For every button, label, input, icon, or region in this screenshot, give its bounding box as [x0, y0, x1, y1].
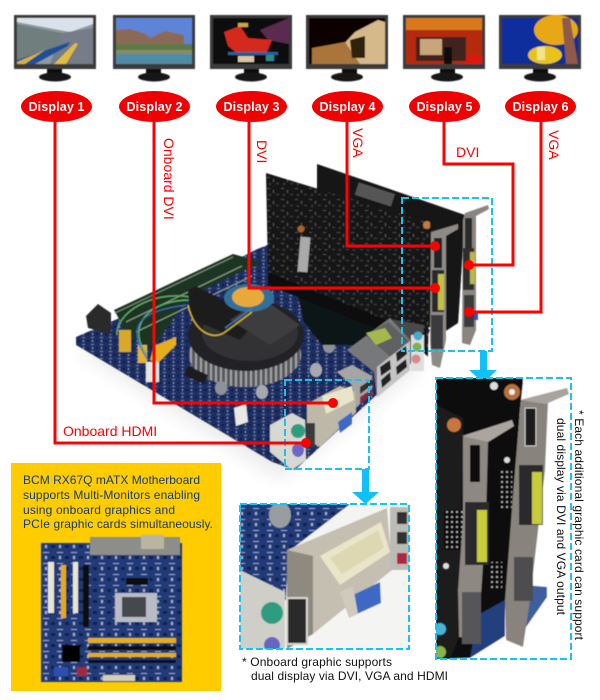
badge: display 3: Display 3 [224, 100, 280, 114]
label: VGA display 6: VGA [546, 130, 562, 160]
label: DVI vertical: DVI [254, 140, 270, 163]
monitor: display 2 [113, 15, 195, 82]
rear card chip detail [355, 182, 395, 207]
summary text: BCM RX67Q mATX Motherboard [23, 473, 200, 487]
badge: display 6 [505, 91, 576, 122]
arrow: card zoom [469, 351, 497, 383]
panel: product summary [11, 463, 221, 691]
onboard DVI and VGA connectors [307, 386, 356, 447]
panel: graphic card connector close-up [434, 378, 571, 659]
summary text [23, 473, 213, 531]
label: DVI horizontal: DVI [456, 144, 479, 160]
note: additional graphic card [554, 410, 586, 641]
label: Onboard HDMI: Onboard HDMI [63, 423, 157, 439]
badge: display 5: Display 5 [416, 100, 473, 114]
rear card bracket [462, 205, 489, 345]
line: display 2 to onboard DVI [154, 120, 333, 403]
connection labels [63, 128, 562, 439]
monitor: display 4 [306, 15, 388, 82]
badge: display 6: Display 6 [512, 100, 569, 114]
CPU cooler [188, 284, 304, 387]
motherboard photo with graphic cards [76, 164, 489, 480]
soft floor shadow [76, 300, 425, 480]
rear IO audio jacks [388, 319, 424, 371]
label: Onboard DVI: Onboard DVI [161, 138, 177, 220]
red connection lines [55, 120, 541, 443]
line: display 1 to HDMI [55, 120, 306, 443]
connection dots [301, 241, 474, 448]
rear graphic card [317, 164, 465, 330]
memory modules [114, 254, 262, 363]
line: display 5 to DVI [444, 120, 513, 265]
monitor: display 3 [210, 15, 292, 82]
motherboard top view [41, 535, 182, 682]
label: VGA display 4: VGA [350, 128, 366, 158]
display badges [21, 91, 576, 122]
front graphic card [266, 173, 430, 357]
note: onboard graphic: * Onboard graphic supports [242, 655, 392, 669]
motherboard [76, 232, 430, 470]
summary text: supports Multi-Monitors enabling [23, 488, 200, 502]
monitor: display 6 [499, 15, 581, 82]
summary text: using onboard graphics and [23, 503, 175, 517]
line: display 3 to DVI [249, 120, 435, 288]
summary text: PCIe graphic cards simultaneously. [23, 517, 213, 531]
line: display 4 to VGA [347, 120, 435, 246]
note: additional graphic card: * Each additional graphic card can support [572, 410, 586, 641]
arrow: onboard zoom [352, 469, 379, 504]
badge: display 3 [216, 91, 287, 122]
card slots [268, 272, 393, 330]
badge: display 5 [409, 91, 480, 122]
PS/2 block and HDMI port [270, 413, 315, 470]
badge: display 1 [21, 91, 92, 122]
front card label and screw hole [297, 221, 431, 272]
note: onboard graphic: dual display via DVI, VGA and HDMI [251, 669, 448, 683]
front card bracket [430, 224, 458, 368]
badge: display 1: Display 1 [28, 100, 85, 114]
rear card right side [430, 215, 465, 340]
badge: display 4: Display 4 [320, 100, 376, 114]
monitor: display 1 [14, 15, 96, 82]
rear IO USB and LAN stacks [337, 318, 410, 408]
monitors row [14, 15, 581, 82]
badge: display 4 [312, 91, 383, 122]
dashed callout: onboard connectors [285, 380, 369, 469]
badge: display 2 [119, 91, 190, 122]
dashed callout: card connectors [402, 198, 492, 351]
note: additional graphic card: dual display via DVI and VGA output [554, 418, 568, 616]
left edge connectors and wires [86, 296, 190, 382]
note: onboard graphic [242, 655, 448, 683]
monitor: display 5 [403, 15, 485, 82]
badge: display 2: Display 2 [126, 100, 183, 114]
panel: onboard connector close-up [240, 502, 409, 653]
line: display 6 to VGA [469, 120, 541, 312]
capacitors and white connector [184, 288, 395, 426]
